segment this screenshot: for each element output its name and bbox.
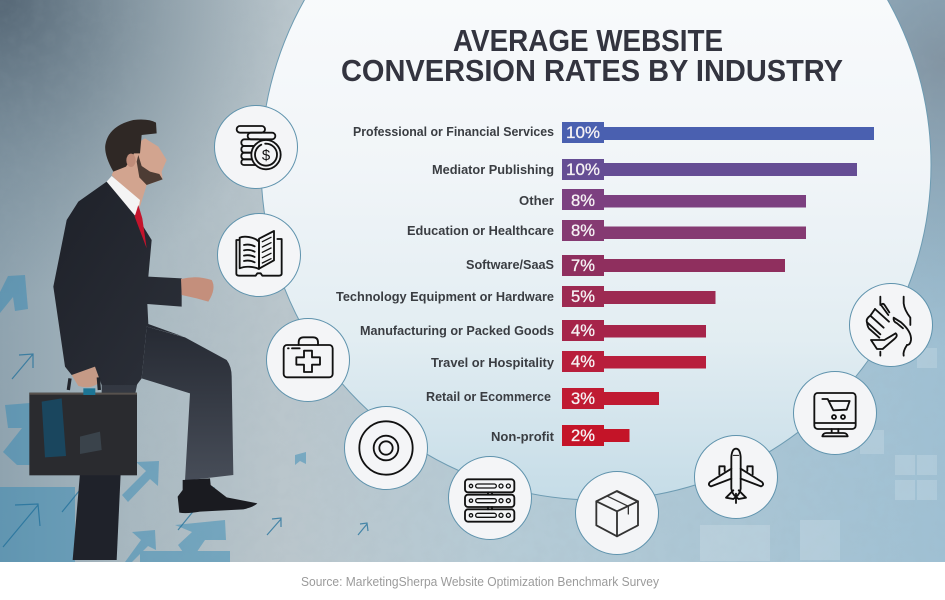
shoe xyxy=(178,478,257,513)
icon: helping hands xyxy=(850,284,932,366)
row: Professional or Financial Services 10%: 10% xyxy=(566,124,600,142)
row: Software/SaaS 7% xyxy=(466,255,785,276)
briefcase xyxy=(68,377,99,390)
row: Software/SaaS 7%: Software/SaaS xyxy=(466,258,554,272)
row: Non-profit 2% xyxy=(491,425,630,446)
row: Manufacturing or Packed Goods 4% xyxy=(360,320,706,341)
row: Manufacturing or Packed Goods 4%: 4% xyxy=(571,322,595,340)
row: Education or Healthcare 8% xyxy=(407,220,806,241)
row: Travel or Hospitality 4%: 4% xyxy=(571,353,595,371)
row: Technology Equipment or Hardware 5%: Technology Equipment or Hardware xyxy=(336,290,554,304)
background arrows: blue growth arrows xyxy=(0,275,368,562)
large white circular panel xyxy=(261,0,931,500)
face and neck xyxy=(112,138,167,207)
row: Professional or Financial Services 10%: Professional or Financial Services xyxy=(353,125,554,139)
icon: airplane xyxy=(694,436,778,518)
hair xyxy=(105,120,157,172)
raised leg xyxy=(102,327,233,481)
jacket xyxy=(53,182,183,385)
row: Other 8% xyxy=(519,189,806,210)
person: businessman stepping up with briefcase xyxy=(29,120,257,560)
row: Retail or Ecommerce 3%: Retail or Ecommerce xyxy=(426,390,551,404)
icon: disc target xyxy=(344,406,428,490)
row: Education or Healthcare 8%: Education or Healthcare xyxy=(407,224,554,238)
ear xyxy=(126,154,136,167)
front hand xyxy=(181,277,214,302)
row: Software/SaaS 7%: 7% xyxy=(571,257,595,275)
row: Mediator Publishing 10% xyxy=(432,159,857,180)
row: Other 8%: 8% xyxy=(571,192,595,210)
row: Mediator Publishing 10%: Mediator Publishing xyxy=(432,163,554,177)
row: Other 8%: Other xyxy=(519,194,554,208)
source note: Source: MarketingSherpa Website Optimization Benchmark Survey xyxy=(301,575,660,589)
row: Mediator Publishing 10%: 10% xyxy=(566,161,600,179)
title xyxy=(341,23,843,88)
tie xyxy=(135,205,147,248)
icon: open book xyxy=(218,214,300,296)
row: Technology Equipment or Hardware 5% xyxy=(336,286,716,307)
bar chart: conversion rates xyxy=(336,122,874,446)
icon: shopping cart on monitor xyxy=(794,372,876,454)
icon: coins xyxy=(214,106,298,188)
icon: medical kit xyxy=(266,318,350,402)
row: Retail or Ecommerce 3%: 3% xyxy=(571,390,595,408)
row: Travel or Hospitality 4% xyxy=(431,351,706,372)
row: Non-profit 2%: 2% xyxy=(571,427,595,445)
back leg xyxy=(73,473,121,560)
title: AVERAGE WEBSITE xyxy=(453,23,723,58)
icon: server rack xyxy=(448,456,532,540)
hand holding case xyxy=(72,366,99,387)
icon: coins: $ xyxy=(262,147,271,164)
beard xyxy=(137,155,163,185)
title: CONVERSION RATES BY INDUSTRY xyxy=(341,53,843,88)
shirt collar xyxy=(107,176,140,216)
row: Education or Healthcare 8%: 8% xyxy=(571,222,595,240)
icon: cardboard box xyxy=(576,472,658,554)
row: Travel or Hospitality 4%: Travel or Hospitality xyxy=(431,356,554,370)
row: Professional or Financial Services 10% xyxy=(353,122,874,143)
row: Manufacturing or Packed Goods 4%: Manufacturing or Packed Goods xyxy=(360,324,554,338)
row: Technology Equipment or Hardware 5%: 5% xyxy=(571,288,595,306)
row: Retail or Ecommerce 3% xyxy=(426,388,659,409)
row: Non-profit 2%: Non-profit xyxy=(491,430,555,444)
